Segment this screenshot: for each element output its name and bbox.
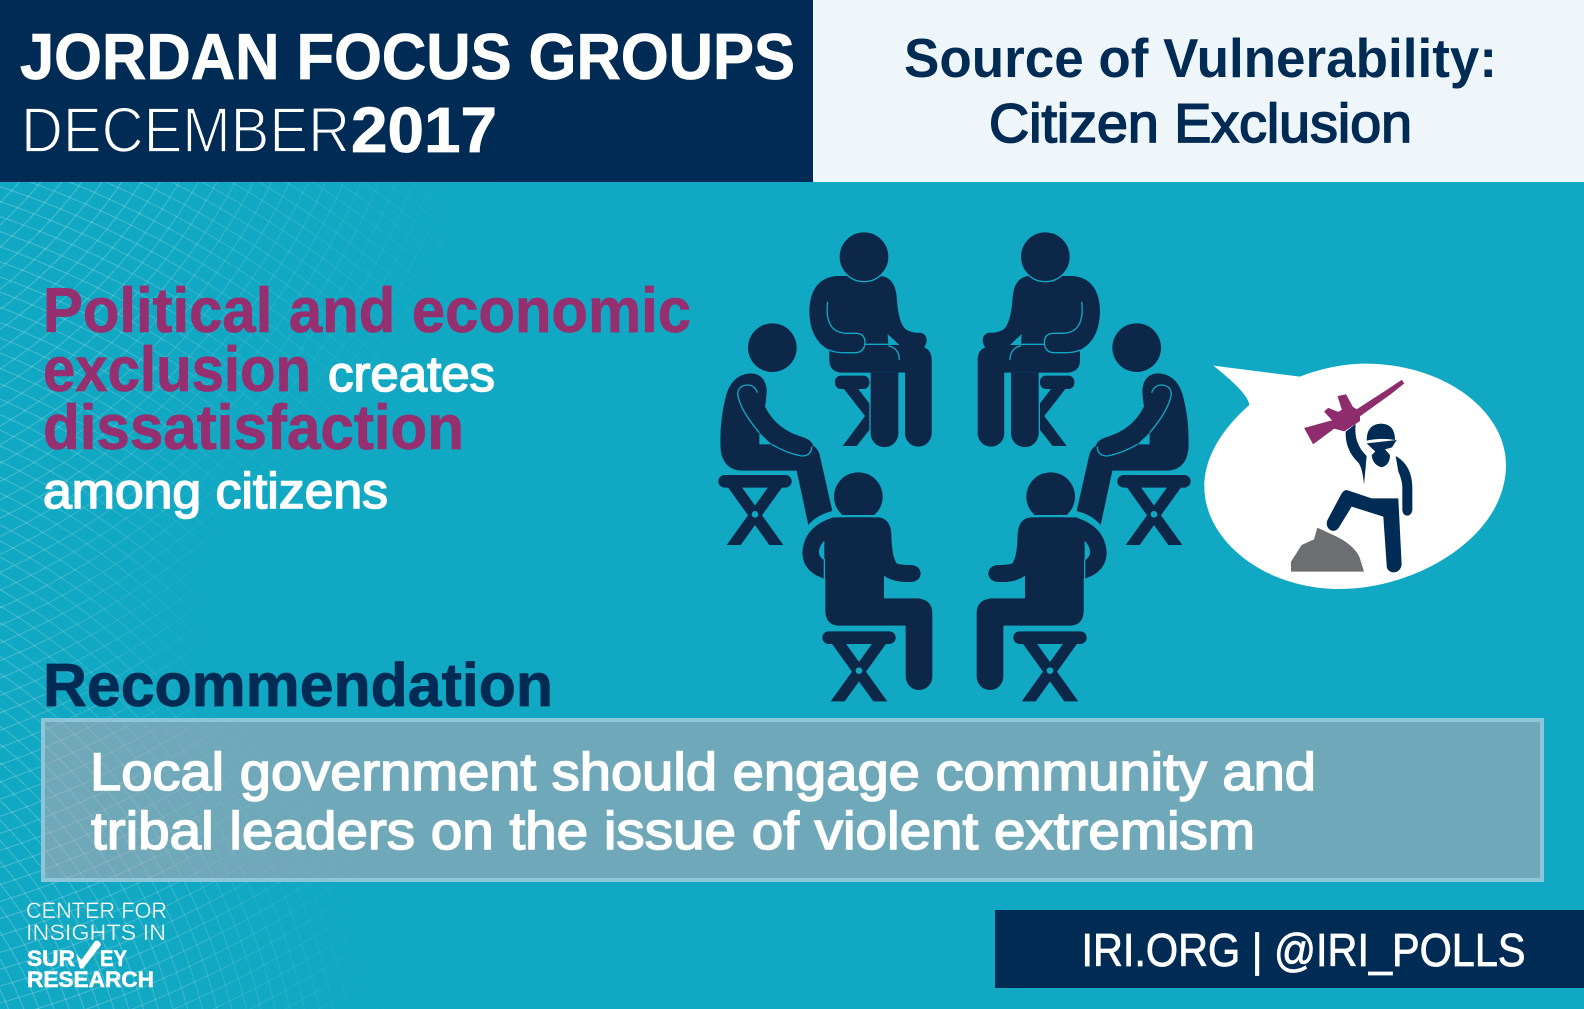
icon: person bottom right [977, 472, 1107, 701]
icon: person middle left [718, 323, 832, 545]
icon: person top right [978, 232, 1100, 448]
icon: person top left [809, 232, 932, 448]
text block: exclusion statement: exclusion [43, 335, 311, 405]
text block: exclusion statement: Political and economic [43, 276, 691, 346]
heading: Recommendation: Recommendation [43, 651, 553, 719]
speech bubble shape [1204, 364, 1506, 589]
logo: Center for Insights in Survey Research: EY [100, 946, 127, 971]
heading: Citizen Exclusion: Citizen Exclusion [989, 92, 1412, 154]
header: title panel [0, 0, 813, 182]
speech bubble with armed figure [1204, 364, 1506, 589]
recommendation text: tribal leaders on the issue of violent extremism [91, 802, 1255, 861]
logo: Center for Insights in Survey Research: INSIGHTS IN [26, 920, 166, 945]
text block: exclusion statement: among citizens [43, 463, 388, 519]
footer: website and handle bar [995, 910, 1584, 988]
text block: exclusion statement: dissatisfaction [43, 393, 464, 463]
icon: person middle right [1077, 323, 1191, 545]
icon: rock [1291, 528, 1364, 572]
logo: Center for Insights in Survey Research: CENTER FOR [26, 898, 167, 923]
icon: person bottom left [802, 472, 932, 701]
heading: Source of Vulnerability: Source of Vulnerability: [904, 27, 1497, 89]
title: Jordan Focus Groups: JORDAN FOCUS GROUPS [20, 20, 795, 93]
recommendation text: Local government should engage community and [90, 743, 1316, 802]
icon: six seated people in a circle [718, 232, 1191, 701]
text block: exclusion statement: creates [328, 346, 495, 402]
logo: Center for Insights in Survey Research [26, 898, 167, 992]
subtitle: December: DECEMBER [21, 94, 350, 166]
recommendation text [90, 743, 1316, 861]
logo: Center for Insights in Survey Research: SUR [27, 946, 75, 971]
icon: check mark [76, 941, 101, 968]
icon: armed figure [1327, 424, 1412, 572]
recommendation box [43, 720, 1542, 880]
footer: website and handle bar: IRI.ORG | @IRI_POLLS [1082, 924, 1526, 976]
subtitle: 2017: 2017 [351, 94, 497, 166]
text block: exclusion statement [43, 276, 691, 519]
icon: rifle [1305, 381, 1403, 443]
logo: Center for Insights in Survey Research: RESEARCH [27, 967, 154, 992]
header: source of vulnerability panel [813, 0, 1584, 182]
